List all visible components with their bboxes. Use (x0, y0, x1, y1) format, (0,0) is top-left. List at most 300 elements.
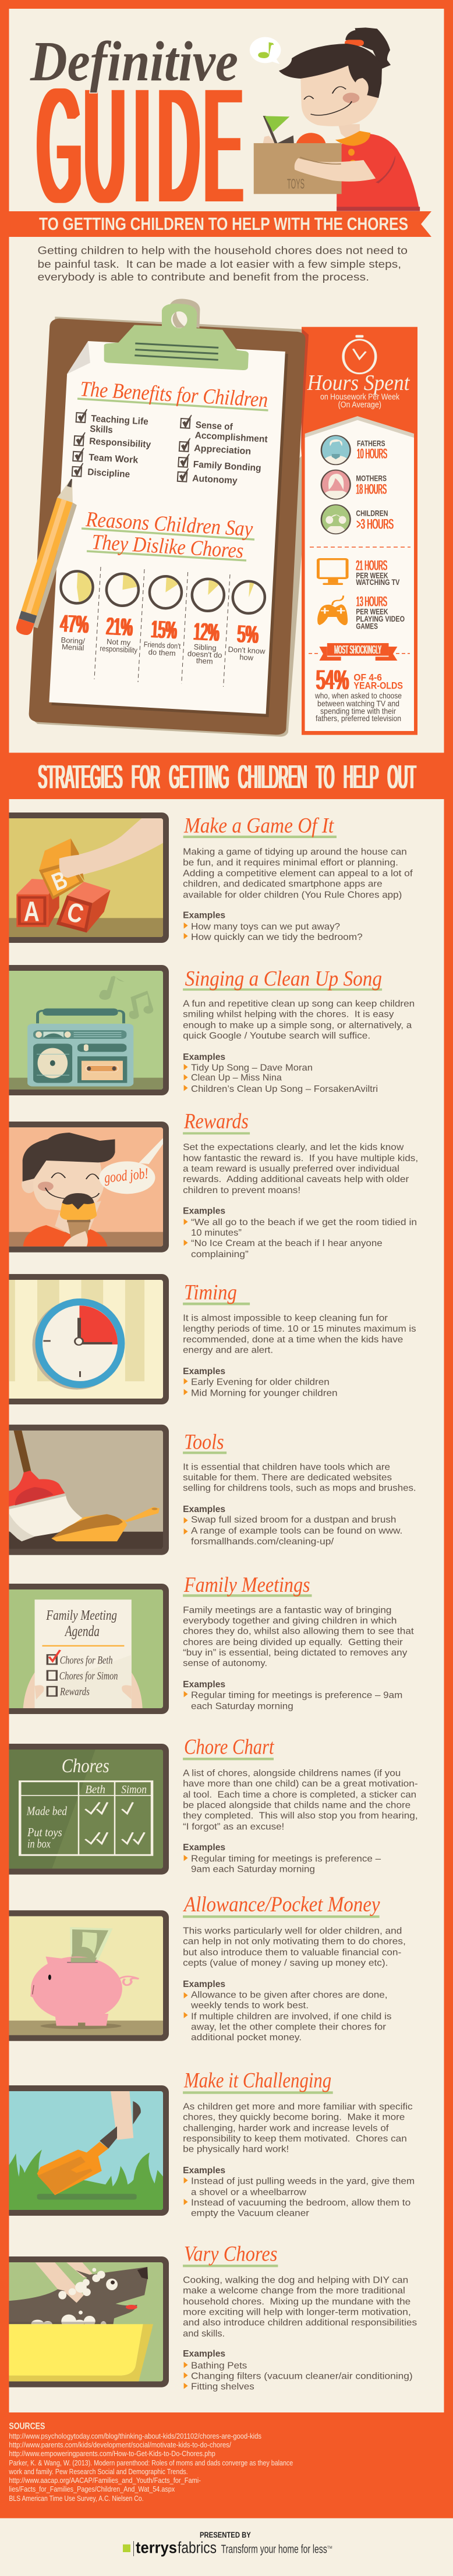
percent labels: doesn't do (187, 649, 222, 659)
examples (183, 2166, 415, 2218)
examples (183, 1052, 378, 1094)
chart labels: in box (27, 1836, 51, 1850)
tv stat (356, 558, 399, 587)
heading: Family Meetings (183, 1573, 310, 1597)
white card with pointed top (305, 416, 414, 731)
hair (279, 44, 382, 98)
examples: Fitting shelves (191, 2382, 254, 2392)
strategy 10 text (183, 2242, 417, 2392)
examples: Examples (183, 1367, 225, 1376)
pie: do not know how 5 percent (232, 580, 266, 614)
body: be physically hard work! (183, 2144, 289, 2154)
examples: How quickly can we tidy the bedroom? (191, 932, 363, 942)
body: but also introduce them to valuable financial con- (183, 1947, 401, 1957)
arm and hand (295, 158, 376, 182)
icon: stopwatch (344, 335, 376, 374)
body: A list of chores, alongside childrens names (if you (183, 1768, 401, 1778)
body: a team reward is usually preferred over individual (183, 1164, 399, 1174)
benefits list: Team Work (89, 453, 139, 466)
clipboard (15, 299, 309, 737)
body (183, 1605, 414, 1668)
sources heading: SOURCES (9, 2421, 45, 2431)
strategy 4 text (183, 1281, 416, 1398)
body: make a welcome change from the more traditional (183, 2286, 405, 2295)
benefits list: Sense of (195, 420, 233, 432)
arms (35, 2262, 93, 2295)
presented by: PRESENTED BY (200, 2531, 251, 2539)
body: can help in not only motivating them to do chores, (183, 1936, 406, 1946)
dog (9, 2267, 147, 2324)
benefits list: Family Bonding (193, 460, 261, 473)
examples (183, 1680, 402, 1711)
percent labels: them (196, 656, 213, 666)
cardboard box (254, 143, 342, 194)
strategy 2 illustration: radio (9, 965, 169, 1095)
strategy 9 illustration: shovel in grass (9, 2085, 169, 2216)
illustration: girl carrying a box of toys (250, 27, 420, 211)
percent labels: responsibility (100, 644, 138, 655)
examples: Examples (183, 911, 225, 921)
stat: 54 percent: 54% (316, 664, 349, 695)
strategy 5 illustration: broom and dustpan (9, 1425, 169, 1555)
heading: benefits: The Benefits for Children (79, 377, 268, 412)
body: It is almost impossible to keep cleaning fun for (183, 1313, 388, 1323)
body: quick Google / Youtube search will suffice. (183, 1031, 370, 1041)
percent labels: Not my (107, 637, 131, 647)
examples: Regular timing for meetings is preference – (191, 1854, 381, 1864)
body: have more than one child) can be a great motivation- (183, 1779, 418, 1789)
examples: Examples (183, 1843, 225, 1853)
pie: boring 47 percent (60, 570, 94, 604)
benefits list: Skills (90, 424, 113, 435)
examples: Examples (183, 1052, 225, 1062)
radio body (38, 1011, 123, 1023)
girl body (337, 134, 420, 211)
subtitle ribbon (9, 211, 431, 237)
agenda text (46, 1608, 118, 1698)
heading: Singing a Clean Up Song (185, 967, 382, 991)
pie: sibling 12 percent (191, 578, 225, 612)
child label (356, 509, 394, 532)
body: rewards. Adding additional caveats help with older (183, 1175, 409, 1184)
title (30, 30, 242, 236)
heading: Rewards (183, 1109, 249, 1133)
percent values: 5% (237, 620, 259, 648)
father label: FATHERS (357, 439, 385, 448)
percent values (60, 609, 259, 648)
examples: Examples (183, 1680, 225, 1690)
strategy 6 illustration: family meeting agenda (9, 1584, 169, 1714)
examples: 10 minutes” (191, 1228, 242, 1238)
icon: child (321, 505, 351, 535)
sources list: BLS American Time Use Survey, A.C. Nielsen Co. (9, 2495, 144, 2503)
sources list: http://www.empoweringparents.com/How-to-Get-Kids-to-Do-Chores.php (9, 2450, 215, 2458)
neck (338, 124, 360, 139)
block B (39, 839, 71, 870)
clipboard shadows (301, 329, 309, 456)
intro text (37, 245, 408, 283)
subheading: (On Average) (338, 400, 381, 410)
face (300, 58, 381, 126)
title word: GUIDE: GUIDE (38, 56, 242, 236)
body: and also introduce children additional responsibilities (183, 2318, 417, 2327)
chart labels: Chores (62, 1755, 109, 1777)
body: sense of autonomy. (183, 1658, 267, 1668)
icon: mother (321, 470, 351, 501)
shovel (100, 2126, 117, 2149)
toys in box (263, 136, 276, 143)
block letters: A (24, 897, 40, 928)
icon: television (318, 559, 347, 585)
strategy 6 text (183, 1573, 414, 1711)
dustpan (124, 1507, 160, 1522)
logo: terrys fabrics: terrys (136, 2539, 177, 2557)
examples: Allowance to be given after chores are done, (191, 1990, 388, 2000)
examples: Early Evening for older children (191, 1377, 330, 1387)
body: how fantastic the reward is. If you have multiple kids, (183, 1154, 418, 1163)
body: energy and are alert. (183, 1345, 273, 1355)
examples: 9am each Saturday morning (191, 1864, 315, 1874)
examples: Instead of vacuuming the bedroom, allow them to (191, 2198, 410, 2208)
stat description: between watching TV and (317, 698, 399, 708)
examples: Clean Up – Miss Nina (191, 1073, 282, 1083)
strategy 7 illustration: chore chart (9, 1744, 169, 1875)
body: everybody together and giving children in which (183, 1616, 397, 1626)
examples: Changing filters (vacuum cleaner/air conditioning) (191, 2371, 413, 2381)
examples (183, 1367, 338, 1398)
heading: Make it Challenging (183, 2069, 331, 2093)
percent labels: do them (148, 647, 176, 658)
body: chores they do, whilst also allowing them to see that (183, 1626, 414, 1636)
percent labels: Don't know (228, 645, 266, 655)
strategy 3 text (183, 1109, 418, 1259)
agenda text: Family Meeting (46, 1608, 117, 1623)
body: Making a game of tidying up around the house can (183, 847, 407, 857)
intro text: everybody is able to contribute and benefit from the process. (37, 271, 369, 283)
logo: terrys fabrics: TM (327, 2546, 332, 2550)
examples: complaining” (191, 1250, 249, 1259)
heading: reasons (82, 508, 254, 563)
examples: Examples (183, 1207, 225, 1216)
heading: Chore Chart (184, 1735, 275, 1759)
chart labels (26, 1755, 147, 1850)
examples: Bathing Pets (191, 2361, 247, 2371)
body: be fun, and it requires minimal effort or planning. (183, 858, 398, 868)
body: Adding a competitive element can appeal to a lot of (183, 868, 413, 878)
intro text: be painful task. It can be made a lot easier with a few simple steps, (37, 258, 401, 270)
body: “I forgot” as an excuse! (183, 1822, 284, 1832)
body: chores are being divided up equally. Getting their (183, 1637, 404, 1647)
subheading: on Housework Per Week (320, 393, 400, 402)
speech bubble (139, 1138, 163, 1164)
mother label: MOTHERS (356, 474, 387, 483)
logo: terrys fabrics (123, 2539, 332, 2557)
stat: 54 percent: OF 4-6 (353, 672, 382, 683)
tv stat: 21 HOURS (356, 558, 387, 573)
clip (169, 299, 200, 328)
cream panel: strategies (9, 799, 444, 2412)
examples: Swap full sized broom for a dustpan and brush (191, 1515, 396, 1525)
music notes (99, 976, 153, 1019)
sources list: lies/Facts_for_Families_Pages/Children_And_Wat_54.aspx (9, 2485, 175, 2493)
examples: each Saturday morning (191, 1701, 293, 1711)
examples (183, 1979, 391, 2042)
title word: Definitive: Definitive (30, 30, 238, 93)
benefits list: Discipline (87, 467, 130, 480)
strategy 5 text (183, 1430, 416, 1546)
examples: Children’s Clean Up Song – ForsakenAviltri (191, 1084, 378, 1094)
strategy 4 illustration: clock (9, 1274, 169, 1404)
sources list: http://www.parents.com/kids/development/social/motivate-kids-to-do-chores/ (9, 2441, 231, 2449)
ribbon: most shockingly (309, 643, 410, 661)
body: suitable for them. There are dedicated websites (183, 1472, 392, 1482)
agenda text: Chores for Simon (59, 1670, 118, 1683)
collar (335, 131, 370, 146)
benefits list: Accomplishment (194, 431, 268, 445)
body: enough to make up a simple song, or alternatively, a (183, 1020, 412, 1030)
foam (31, 2268, 107, 2328)
examples: weekly tends to work best. (190, 2000, 309, 2010)
percent values: 21% (106, 612, 133, 641)
percent labels: how (239, 652, 254, 662)
examples: Examples (183, 2166, 225, 2176)
agenda text: Rewards (59, 1686, 90, 1698)
body: children, and dedicated smartphone apps are (183, 879, 383, 889)
strategy 1 text (183, 814, 413, 942)
body (183, 1926, 406, 1968)
examples (183, 911, 363, 942)
body: challenging, harder work and increase levels of (183, 2123, 389, 2133)
body: they completed. This will also stop you from hearing, (183, 1811, 418, 1821)
examples: A range of example tools can be found on www. (191, 1526, 402, 1536)
body: and skills. (183, 2329, 225, 2339)
benefits list (72, 409, 268, 486)
examples (183, 2349, 413, 2392)
heading: Make a Game Of It (183, 814, 335, 838)
tv stat: PER WEEK (356, 571, 388, 580)
shirt (23, 1225, 108, 1247)
tv stat: WATCHING TV (356, 578, 399, 587)
sources list (9, 2432, 293, 2503)
examples: additional pocket money. (191, 2032, 302, 2042)
percent labels: Friends don't (144, 640, 181, 651)
examples (183, 1843, 381, 1874)
body: smiling whilst helping with the chores. It is easy (183, 1009, 394, 1019)
ribbon: most shockingly: MOST SHOCKINGLY (334, 644, 381, 657)
strategy 9 text (183, 2069, 415, 2218)
sources list: Parker, K. & Wang, W. (2013). Modern parenthood: Roles of moms and dads converge as they balance (9, 2459, 293, 2467)
benefits list: Teaching Life (91, 414, 148, 427)
examples: “We all go to the beach if we get the room tidied in (191, 1218, 417, 1227)
strategy 8 illustration: piggy bank (9, 1910, 169, 2041)
examples: Examples (183, 1505, 225, 1514)
stat description: spending time with their (320, 706, 396, 715)
heading: Allowance/Pocket Money (182, 1893, 380, 1917)
body (183, 1142, 418, 1195)
strategy 2 text (183, 967, 415, 1094)
percent labels: Boring/ (61, 636, 86, 645)
pencil (15, 477, 84, 638)
pie: not my responsibility 21 percent (105, 573, 139, 606)
chart labels: Simon (121, 1783, 147, 1796)
percent labels: Menial (62, 643, 84, 652)
percent labels: Sibling (193, 643, 217, 652)
benefits list: Responsibility (89, 437, 151, 450)
child label: >3 HOURS (356, 516, 394, 532)
icon: game controller (317, 595, 348, 625)
banknote (70, 1927, 113, 1963)
cheek and smile (343, 93, 359, 103)
percent labels (61, 636, 266, 666)
sources (9, 2421, 293, 2503)
benefits list: Autonomy (192, 474, 238, 486)
strategy 3 illustration: boy with ice cream (9, 1122, 169, 1252)
games stat: PLAYING VIDEO (356, 615, 405, 623)
body: children to prevent moans! (183, 1186, 300, 1195)
strategy 8 text (182, 1893, 406, 2042)
block letters: B (48, 865, 71, 896)
cream panel: header and statistics (9, 9, 444, 753)
examples (183, 1505, 402, 1546)
tub (9, 2324, 153, 2382)
agenda text: Agenda (64, 1623, 100, 1640)
stat: 54 percent (316, 664, 403, 695)
panel: hours spent on housework (302, 327, 417, 735)
child label: CHILDREN (356, 509, 388, 518)
pie: friends 15 percent (148, 576, 182, 609)
body: Set the expectations clearly, and let the kids know (183, 1142, 404, 1152)
logo: terrys fabrics: fabrics (178, 2539, 217, 2557)
broom (13, 1430, 31, 1472)
body (183, 2102, 413, 2154)
percent values: 15% (151, 615, 178, 644)
examples: empty the Vacuum cleaner (191, 2208, 310, 2218)
examples: forsmallhands.com/cleaning-up/ (191, 1537, 334, 1546)
logo: terrys fabrics: Transform your home for less (221, 2543, 327, 2556)
games stat: PER WEEK (356, 608, 388, 616)
sources list: http://www.aacap.org/AACAP/Families_and_Youth/Facts_for_Fami- (9, 2476, 201, 2485)
chart labels: Beth (85, 1783, 105, 1796)
block C (67, 882, 111, 903)
block letters: C (64, 896, 87, 929)
good job text: good job! (104, 1165, 149, 1186)
agenda text: Chores for Beth (60, 1654, 113, 1666)
percent values: 47% (60, 609, 89, 638)
examples: Tidy Up Song – Dave Moran (191, 1063, 313, 1073)
arm (111, 2091, 133, 2140)
examples: Examples (183, 1979, 225, 1989)
games stat: GAMES (356, 622, 378, 631)
body: lengthy periods of time. 10 or 15 minutes maximum is (183, 1324, 416, 1334)
subheading (320, 393, 400, 410)
block A (16, 879, 49, 894)
examples (183, 1207, 417, 1259)
sources list: work and family. Pew Research Social and Demographic Trends. (9, 2468, 188, 2476)
benefits list: Appreciation (194, 443, 252, 457)
clipboard board (29, 318, 306, 735)
body: responsibility to keep them motivated. Chores can (183, 2134, 407, 2144)
body: It is essential that children have tools which are (183, 1462, 390, 1472)
body: al tool. Each time a chore is completed, a sticker can (183, 1790, 416, 1800)
body: A fun and repetitive clean up song can keep children (183, 999, 415, 1009)
sources list: http://www.psychologytoday.com/blog/thinking-about-kids/201102/chores-are-good-kids (9, 2432, 261, 2440)
heading: reasons: They Dislike Chores (91, 530, 244, 563)
examples: “No Ice Cream at the beach if I hear anyone (191, 1239, 383, 1248)
body: more exciting will help with longer-term motivation, (183, 2307, 411, 2317)
examples: Mid Morning for younger children (191, 1388, 338, 1398)
body: be placed alongside that childs name and the chore (183, 1800, 410, 1810)
chart labels: Put toys (27, 1825, 62, 1839)
intro text: Getting children to help with the household chores does not need to (37, 245, 408, 257)
body: cepts (value of money / saving up money etc). (183, 1958, 388, 1968)
body: chores, they quickly become boring. Make it more (183, 2112, 405, 2122)
body (183, 847, 413, 900)
body: “buy in” is essential, being dictated to removes any (183, 1648, 407, 1658)
body (183, 2275, 417, 2339)
panel: hours spent on housework: 18 HOURS (356, 481, 387, 497)
examples: How many toys can we put away? (191, 922, 340, 932)
heading: Hours Spent: Hours Spent (307, 371, 410, 395)
examples: If multiple children are involved, if one child is (191, 2011, 391, 2021)
stat description: fathers, preferred television (316, 714, 401, 723)
paper (51, 343, 288, 717)
examples: away, let the other complete their chores for (191, 2022, 387, 2032)
stat description: who, when asked to choose (314, 691, 402, 700)
stat description (314, 691, 402, 723)
games stat (356, 594, 405, 631)
body: As children get more and more familiar with specific (183, 2102, 413, 2112)
examples: Regular timing for meetings is preference – 9am (191, 1690, 402, 1700)
icon: father (321, 435, 351, 466)
strategy 7 text (183, 1735, 418, 1874)
heading: Timing (184, 1281, 237, 1305)
mother label (356, 474, 387, 497)
examples: a shovel or a wheelbarrow (191, 2187, 306, 2197)
pig (45, 1957, 62, 1964)
hands holding paper (23, 1672, 143, 1708)
body: household chores. Mixing up the mundane with the (183, 2297, 410, 2307)
dividers (94, 567, 230, 687)
boy head (22, 1179, 34, 1193)
heading: Vary Chores (184, 2242, 277, 2266)
body: Family meetings are a fantastic way of bringing (183, 1605, 391, 1615)
body: This works particularly well for older children, and (183, 1926, 402, 1936)
body (183, 1462, 416, 1493)
body: available for older children (You Rule Chores app) (183, 890, 402, 900)
ponytail (345, 27, 391, 69)
block letters (24, 872, 83, 922)
body: Cooking, walking the dog and helping with DIY can (183, 2275, 408, 2285)
hand (63, 1231, 88, 1247)
games stat: 13 HOURS (356, 594, 387, 610)
cream footer band (0, 2518, 453, 2576)
examples: Examples (183, 2349, 225, 2359)
strategy 1 illustration: building blocks (9, 812, 169, 943)
body: recommended, done at a time when the kids have (183, 1335, 403, 1345)
arm (79, 818, 163, 875)
body (183, 999, 415, 1041)
stat: 54 percent: YEAR-OLDS (353, 680, 403, 691)
percent values: 12% (193, 618, 220, 646)
speech bubble with note (250, 37, 281, 64)
strategy 10 illustration: washing the dog (9, 2256, 169, 2387)
father label (357, 439, 387, 462)
body (183, 1768, 418, 1832)
panel: hours spent on housework: 10 HOURS (357, 446, 387, 462)
heading: reasons: Reasons Children Say (85, 508, 254, 541)
body (183, 1313, 416, 1355)
heading: Tools (184, 1430, 224, 1454)
